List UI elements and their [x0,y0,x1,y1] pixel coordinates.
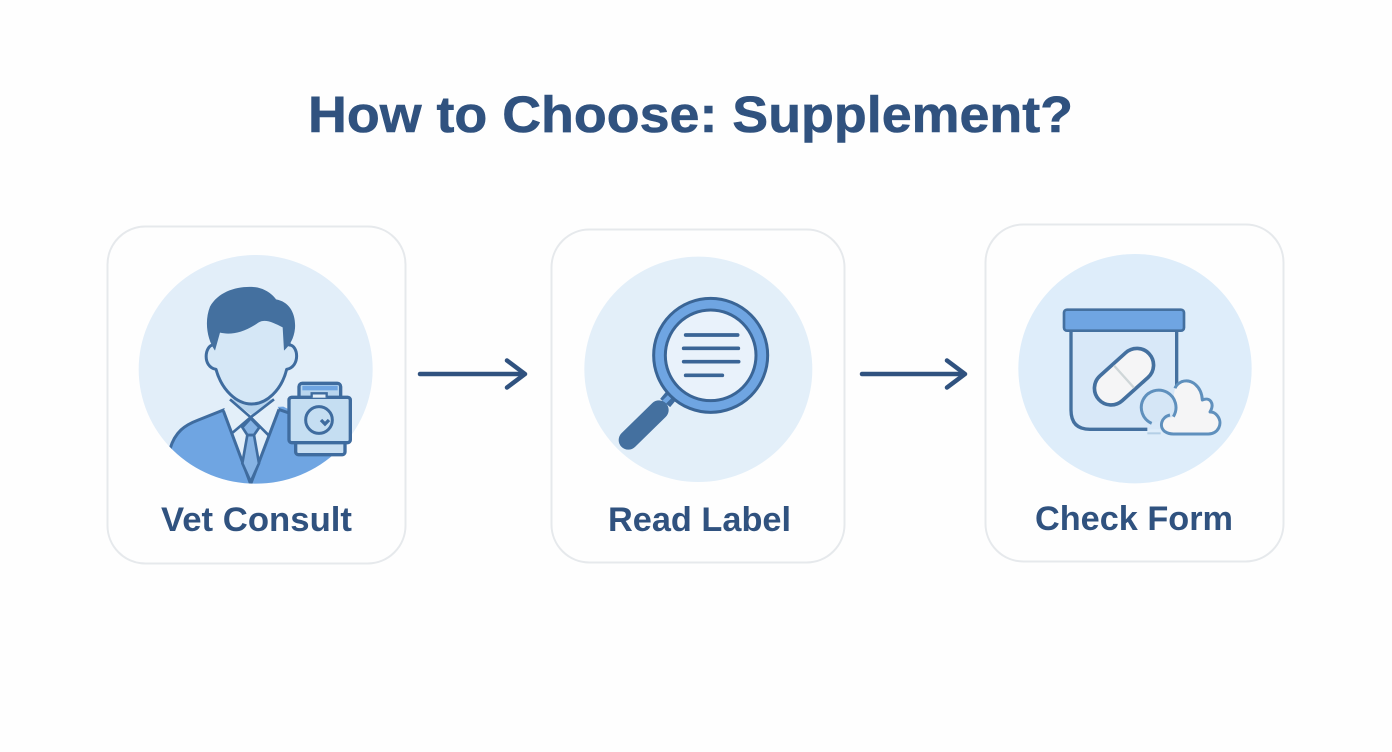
label: check form: Check Form [1035,500,1233,538]
arrow: vet to label [420,360,525,388]
panel: vet consult [108,226,406,564]
panel: read label [552,230,844,562]
icon: magnifying glass [584,257,812,482]
arrow: label to form [862,360,965,388]
title: How to Choose: Supplement? [308,86,1073,143]
panel: check form [986,224,1284,562]
icon: vet with device [139,255,373,490]
label: read label: Read Label [608,501,791,539]
label: vet consult: Vet Consult [161,501,352,539]
icon: jar with pill and cloud [1018,254,1252,483]
